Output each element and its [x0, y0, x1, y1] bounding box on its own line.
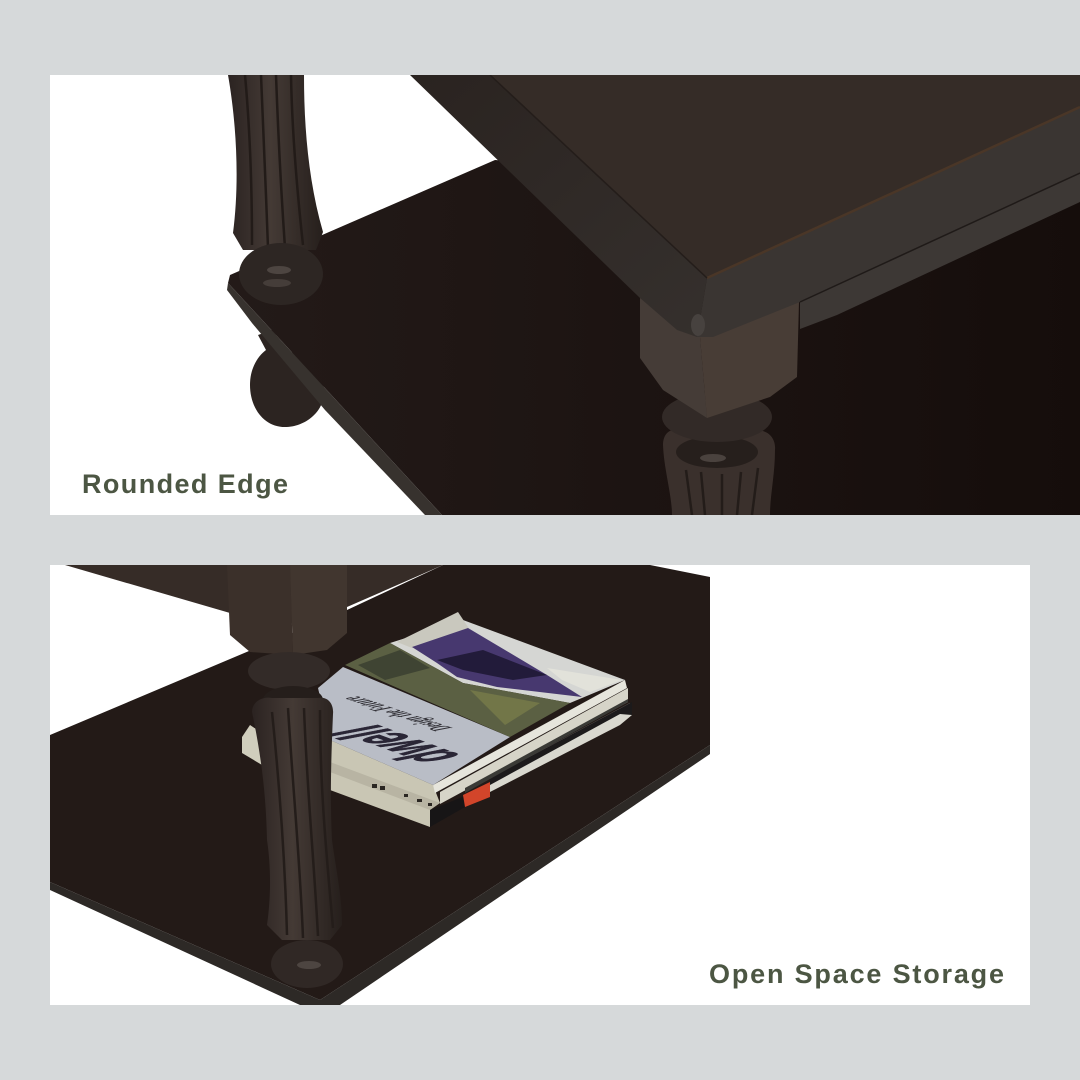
- magazine stack: [242, 612, 632, 827]
- back leg: [228, 75, 323, 305]
- ball foot below shelf: [250, 330, 324, 427]
- panel: rounded edge: [50, 75, 1080, 515]
- heading: open space storage: Open Space Storage: [709, 959, 1004, 989]
- heading: rounded edge: Rounded Edge: [82, 469, 288, 499]
- shelf: [50, 565, 710, 1005]
- table top: [410, 75, 1080, 337]
- page block: [330, 740, 440, 827]
- magazine subtitle: Design the Future: [333, 695, 459, 733]
- magazine title: dwell: [312, 721, 479, 768]
- lower shelf: [227, 160, 1080, 515]
- table apron: [65, 565, 443, 624]
- magazine spines: [490, 703, 632, 792]
- table front leg: [640, 298, 799, 515]
- magazine cover: [318, 667, 510, 785]
- table front leg: [227, 565, 347, 988]
- panel: open space storage: [50, 565, 1030, 1005]
- apron: [800, 173, 1080, 329]
- purple house photo: [412, 628, 582, 697]
